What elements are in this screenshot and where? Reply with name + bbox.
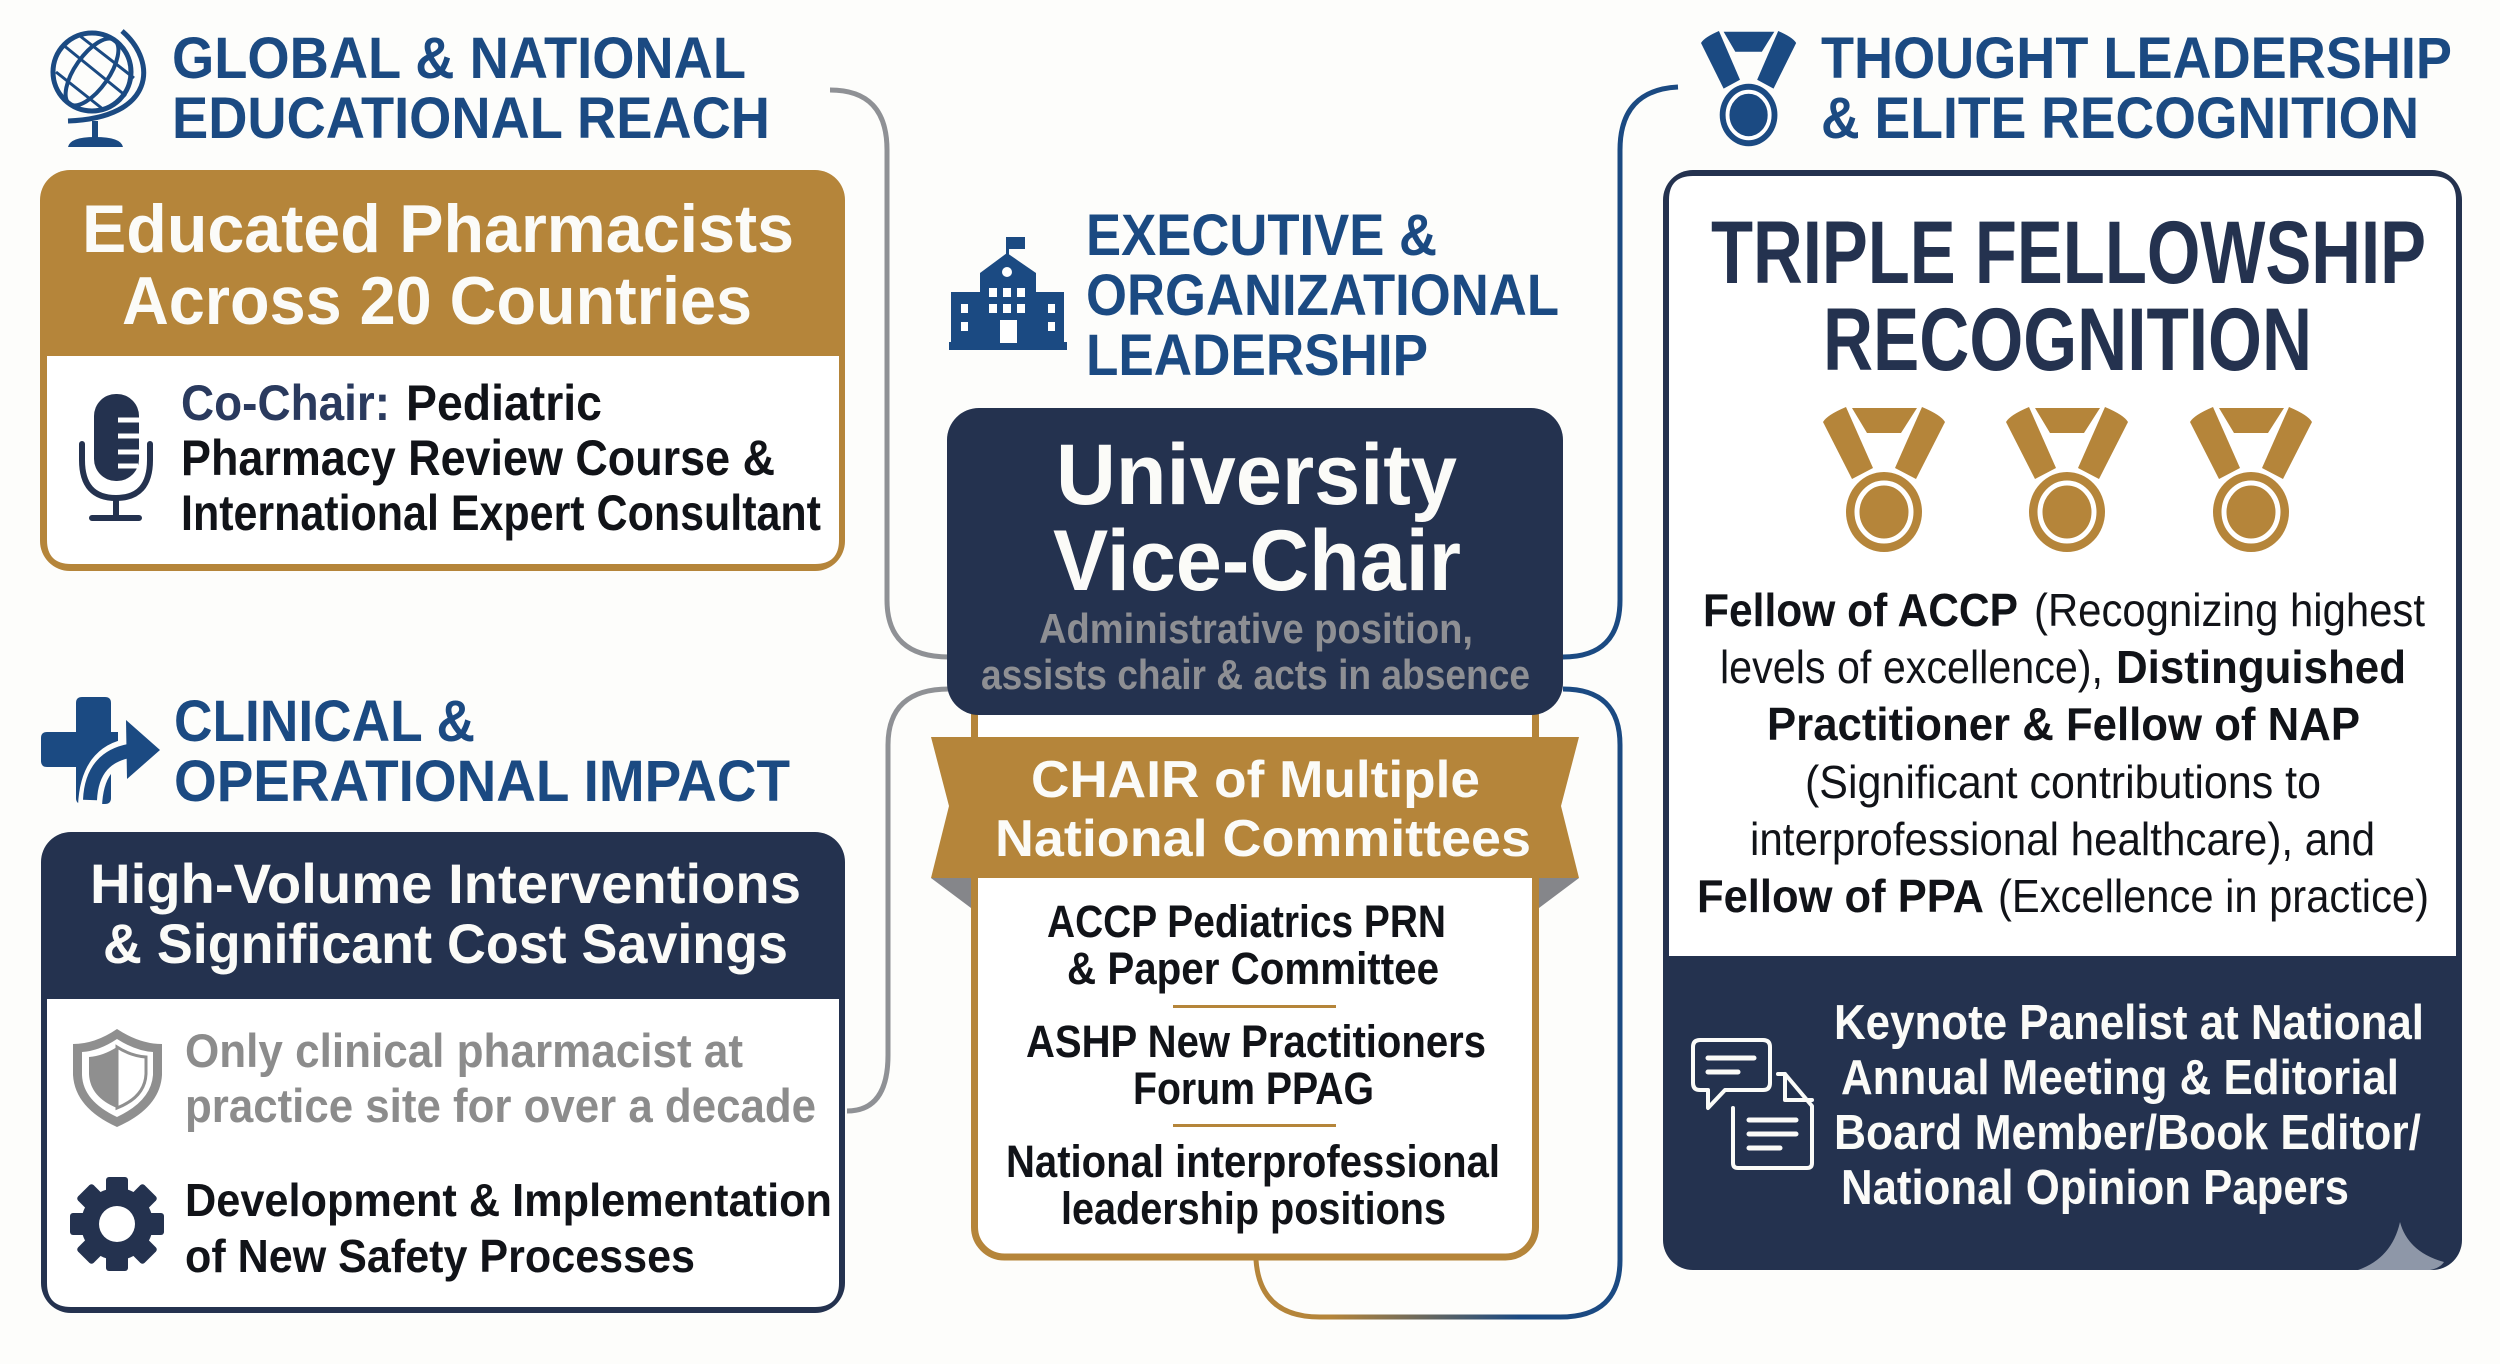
icon: university building xyxy=(949,237,1067,350)
panel header text xyxy=(90,852,801,975)
heading text xyxy=(1086,203,1559,388)
panel header text: High-Volume Interventions xyxy=(90,852,801,915)
icon: blue medal xyxy=(1701,31,1796,146)
connector: vice-chair to committees xyxy=(1256,689,1620,1317)
fellowship title: RECOGNITION xyxy=(1823,289,2312,389)
fellowship description: Fellow of PPA xyxy=(1697,870,1984,922)
keynote text: Annual Meeting & Editorial xyxy=(1841,1051,2399,1105)
committee list: ACCP Pediatrics PRN xyxy=(1047,896,1446,947)
heading text: GLOBAL & NATIONAL xyxy=(172,26,746,91)
panel header text xyxy=(82,191,794,339)
ribbon text: National Committees xyxy=(995,810,1531,868)
icon: speech bubble and document xyxy=(1693,1040,1812,1168)
ribbon text: CHAIR of Multiple xyxy=(1031,751,1480,809)
ribbon folds xyxy=(931,878,1579,908)
committee list: Forum PPAG xyxy=(1133,1063,1374,1114)
text: safety processes: Development & Implementation xyxy=(185,1174,832,1226)
icon: microphone xyxy=(82,394,150,518)
connector: recognition to vice-chair xyxy=(1563,87,1678,657)
ribbon text xyxy=(995,751,1531,868)
fellowship description: Fellow of ACCP xyxy=(1703,584,2018,636)
section: executive heading xyxy=(949,203,1559,388)
icon: globe xyxy=(53,30,144,147)
fellowship description: Practitioner & Fellow of NAP xyxy=(1767,698,2360,750)
committee list xyxy=(1006,896,1500,1234)
fellowship description: (Excellence in practice) xyxy=(1998,870,2429,922)
committee list: National interprofessional xyxy=(1006,1136,1500,1187)
panel: chair of national committees xyxy=(931,680,1579,1257)
corner accent xyxy=(2358,1222,2444,1270)
section: clinical impact heading xyxy=(41,689,790,814)
panel body text: Pediatric xyxy=(406,375,602,431)
panel: triple fellowship xyxy=(1663,170,2462,1270)
vice-chair title: University xyxy=(1056,427,1457,523)
section: thought leadership heading xyxy=(1701,26,2452,151)
panel: university vice-chair xyxy=(947,408,1563,715)
panel header text: & Significant Cost Savings xyxy=(103,912,788,975)
heading text: EDUCATIONAL REACH xyxy=(172,86,770,151)
keynote text: Board Member/Book Editor/ xyxy=(1834,1106,2421,1160)
ribbon banner xyxy=(931,737,1579,878)
heading text xyxy=(174,689,790,814)
committee list: & Paper Committee xyxy=(1067,943,1439,994)
fellowship description: (Recognizing highest xyxy=(2034,584,2425,636)
vice-chair title: Vice-Chair xyxy=(1053,513,1461,609)
heading text: OPERATIONAL IMPACT xyxy=(174,749,790,814)
section: global reach heading xyxy=(53,26,770,151)
keynote text xyxy=(1834,996,2424,1215)
heading text: EXECUTIVE & xyxy=(1086,203,1437,268)
panel body text: International Expert Consultant xyxy=(181,485,821,541)
committee list: ASHP New Practitioners xyxy=(1026,1016,1486,1067)
heading text: & ELITE RECOGNITION xyxy=(1821,86,2419,151)
connector: reach to vice-chair xyxy=(830,90,949,657)
committee list: leadership positions xyxy=(1061,1183,1446,1234)
panel body text: Co-Chair: xyxy=(181,375,390,431)
keynote text: Keynote Panelist at National xyxy=(1834,996,2424,1050)
fellowship description: interprofessional healthcare), and xyxy=(1750,813,2375,865)
text: safety processes: of New Safety Processes xyxy=(185,1230,695,1282)
fellowship description: Distinguished xyxy=(2116,641,2406,693)
text: only clinical pharmacist: practice site for over a decade xyxy=(185,1079,816,1132)
icon: shield xyxy=(73,1029,162,1127)
heading text xyxy=(172,26,770,151)
heading text xyxy=(1821,26,2452,151)
text: safety processes xyxy=(185,1174,832,1282)
heading text: LEADERSHIP xyxy=(1086,323,1428,388)
keynote text: National Opinion Papers xyxy=(1841,1161,2349,1215)
panel body text: Pharmacy Review Course & xyxy=(181,430,775,486)
icon: gear xyxy=(70,1177,164,1271)
vice-chair description: assists chair & acts in absence xyxy=(981,651,1530,698)
fellowship description xyxy=(1697,584,2429,922)
icon: medical cross with arrow xyxy=(41,697,168,806)
fellowship title xyxy=(1711,202,2426,389)
panel header text: Across 20 Countries xyxy=(122,263,752,339)
icon: gold medal 1 xyxy=(1823,407,1945,552)
connector: impact to vice-chair xyxy=(847,689,949,1111)
vice-chair description: Administrative position, xyxy=(1039,605,1473,652)
fellowship description: (Significant contributions to xyxy=(1805,756,2321,808)
panel: educated pharmacists xyxy=(40,170,845,571)
heading text: CLINICAL & xyxy=(174,689,475,754)
heading text: THOUGHT LEADERSHIP xyxy=(1821,26,2452,91)
text: only clinical pharmacist: Only clinical pharmacist at xyxy=(185,1024,743,1077)
vice-chair title xyxy=(1053,427,1461,609)
icon: gold medal 2 xyxy=(2006,407,2128,552)
heading text: ORGANIZATIONAL xyxy=(1086,263,1559,328)
panel header text: Educated Pharmacists xyxy=(82,191,794,267)
icon: gold medal 3 xyxy=(2190,407,2312,552)
text: only clinical pharmacist xyxy=(185,1024,816,1132)
vice-chair description xyxy=(981,605,1530,698)
panel: high-volume interventions xyxy=(41,832,845,1313)
panel body text xyxy=(181,375,821,541)
fellowship description: levels of excellence), xyxy=(1720,641,2103,693)
